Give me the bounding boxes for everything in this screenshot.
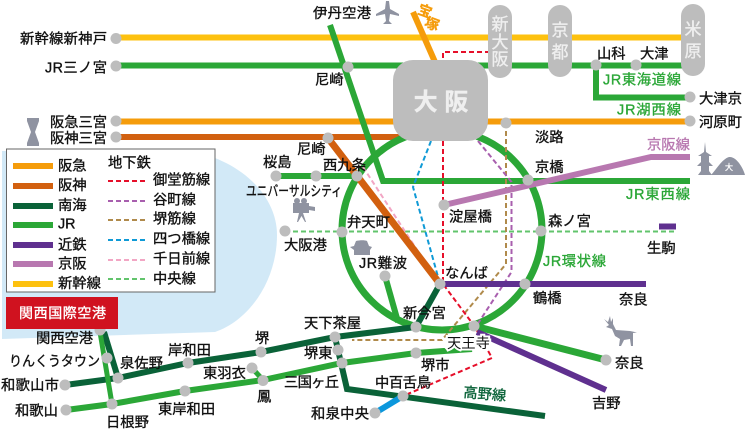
station labels: 淀屋橋 — [449, 208, 492, 226]
Sennichimae subway line — [363, 167, 438, 282]
station labels: 京橋 — [535, 159, 564, 176]
station labels: JR難波 — [359, 255, 407, 272]
station labels: 奈良 — [615, 355, 644, 372]
station labels: 桜島 — [263, 154, 292, 171]
Midosuji subway line — [403, 52, 492, 396]
station labels: 大津 — [640, 46, 669, 62]
station labels: 阪神三宮 — [50, 130, 107, 147]
station labels: 泉佐野 — [120, 355, 163, 372]
station labels: 森ノ宮 — [548, 213, 591, 230]
station labels: 天下茶屋 — [304, 315, 361, 332]
Hankyu line — [116, 118, 690, 124]
station labels: 関西空港 — [36, 330, 93, 347]
station labels: 堺市 — [421, 357, 450, 374]
legend: railway companies: 南海 — [58, 197, 87, 214]
line name labels — [416, 1, 690, 405]
Semboku line — [375, 396, 403, 413]
rail lines — [65, 12, 690, 416]
legend: subway lines: 地下鉄 — [108, 154, 151, 172]
station labels: 山科 — [597, 46, 626, 62]
line name labels: JR東海道線 — [603, 72, 681, 88]
legend: subway lines — [108, 154, 210, 288]
line name labels: JR湖西線 — [617, 102, 681, 118]
station labels: 鶴橋 — [533, 290, 562, 307]
station labels: なんば — [445, 265, 488, 282]
station labels: JR三ノ宮 — [45, 60, 107, 76]
icon: port tower — [27, 118, 39, 146]
line name labels: 宝 — [416, 1, 434, 21]
legend: subway lines: 中央線 — [153, 270, 196, 288]
Nankai main line — [65, 284, 440, 385]
JR Hanwa line — [66, 349, 472, 410]
Kansai airport label — [6, 297, 118, 329]
station labels: 吉野 — [592, 395, 621, 412]
hub: Osaka: 大 阪 — [414, 89, 468, 116]
station labels: 東岸和田 — [158, 401, 215, 418]
hub: Kyoto: 都 — [552, 43, 568, 62]
hub: Maibara — [681, 4, 705, 76]
station labels: 阪急三宮 — [50, 114, 107, 131]
Tanimachi subway line — [477, 141, 512, 325]
station labels: 日根野 — [106, 414, 149, 431]
legend: subway lines: 堺筋線 — [153, 210, 196, 228]
Sakurajima line — [276, 173, 357, 179]
station labels: 天王寺 — [447, 335, 490, 352]
line name labels: 京阪線 — [647, 136, 690, 154]
JR airport line — [100, 332, 112, 404]
icon: movie camera — [293, 198, 315, 222]
hub: Kyoto — [548, 5, 572, 77]
legend: subway lines: 御堂筋線 — [153, 172, 210, 188]
station labels: 弁天町 — [347, 214, 390, 231]
Nankai airport line — [104, 332, 118, 378]
legend: subway lines: 四つ橋線 — [153, 230, 210, 248]
station labels: 尼崎 — [297, 141, 326, 158]
station labels: 堺 — [255, 330, 269, 347]
station labels: 鳳 — [257, 390, 271, 406]
station labels: 西九条 — [323, 157, 366, 174]
icon: deer — [604, 316, 637, 346]
station labels: 大津京 — [699, 90, 742, 108]
legend: railway companies: 京阪 — [58, 256, 87, 272]
hub: Shin-Osaka: 新 — [492, 15, 508, 34]
Koya line — [335, 337, 545, 416]
station labels: 岸和田 — [168, 342, 211, 359]
station labels: 奈良 — [619, 292, 648, 308]
icon: airplane — [376, 1, 399, 24]
station labels: 尼崎 — [315, 72, 344, 88]
station labels: りんくうタウン — [9, 353, 100, 370]
hub: Shin-Osaka: 大 — [492, 33, 508, 52]
legend: railway companies: 阪神 — [58, 177, 87, 194]
icon: mountain: 大 — [725, 162, 733, 172]
station labels: 新幹線新神戸 — [20, 30, 107, 48]
osaka bay water — [2, 151, 277, 339]
Kansai airport label: 関西国際空港 — [19, 305, 106, 321]
Hanshin line — [116, 134, 400, 140]
line name labels: JR東西線 — [626, 186, 690, 203]
JR Namba line — [385, 276, 398, 322]
station labels: 生駒 — [647, 240, 676, 257]
Yotsubashi subway line — [413, 141, 440, 284]
Kintetsu Ikoma stub — [659, 224, 676, 230]
JR Nara line — [474, 326, 606, 360]
station labels: 和歌山市 — [1, 377, 59, 394]
station labels: 大阪港 — [284, 237, 327, 254]
hub: Shin-Osaka: 阪 — [492, 50, 508, 69]
icon: mountain — [711, 157, 745, 175]
legend: railway companies: JR — [58, 216, 75, 232]
station labels: 中百舌鳥 — [375, 374, 431, 392]
station labels: 和歌山 — [15, 402, 58, 420]
icon: pagoda — [697, 142, 713, 175]
legend: subway lines: 谷町線 — [153, 192, 196, 208]
station labels: 新今宮 — [403, 305, 446, 322]
station labels: ユニバーサルシティ — [246, 184, 342, 200]
Chuo subway line — [285, 230, 676, 232]
Hagoromo branch — [252, 368, 263, 380]
legend: railway companies: 近鉄 — [58, 236, 87, 254]
Keihan line — [444, 157, 690, 205]
station labels: 東羽衣 — [203, 365, 246, 382]
station labels: 河原町 — [699, 114, 742, 131]
JR loop line — [342, 130, 542, 330]
legend: railway companies — [13, 158, 101, 292]
Takarazuka line — [413, 12, 435, 62]
JR Kosei line — [596, 65, 690, 98]
station labels: 伊丹空港 — [313, 5, 371, 22]
hub: Kyoto: 京 — [552, 21, 568, 40]
hub: Shin-Osaka — [488, 5, 512, 78]
legend: subway lines: 千日前線 — [153, 250, 210, 268]
station labels: 堺東 — [304, 345, 333, 362]
legend: railway companies: 阪急 — [58, 158, 87, 174]
legend: railway companies: 新幹線 — [58, 275, 101, 292]
hub: Osaka — [393, 60, 488, 141]
Hanshin slanted line — [328, 138, 440, 284]
icon: castle dome — [350, 240, 372, 255]
JR Tozai line — [330, 25, 690, 181]
Kintetsu Yoshino line — [477, 332, 606, 390]
line name labels: JR環状線 — [543, 253, 606, 270]
Sakaisuji subway line — [352, 123, 506, 340]
station labels: 淡路 — [535, 129, 564, 146]
Kintetsu Nara line — [440, 281, 646, 287]
line name labels: 塚 — [423, 14, 441, 34]
station labels: 和泉中央 — [311, 406, 369, 422]
shinkansen line — [116, 34, 682, 40]
hub: Maibara: 米 — [684, 20, 702, 39]
station labels: 三国ヶ丘 — [284, 374, 339, 391]
line name labels: 高野線 — [463, 384, 507, 405]
hub: Maibara: 原 — [684, 42, 702, 61]
legend panel — [6, 149, 215, 292]
stations — [60, 33, 696, 418]
JR Tokaido line — [116, 62, 682, 68]
